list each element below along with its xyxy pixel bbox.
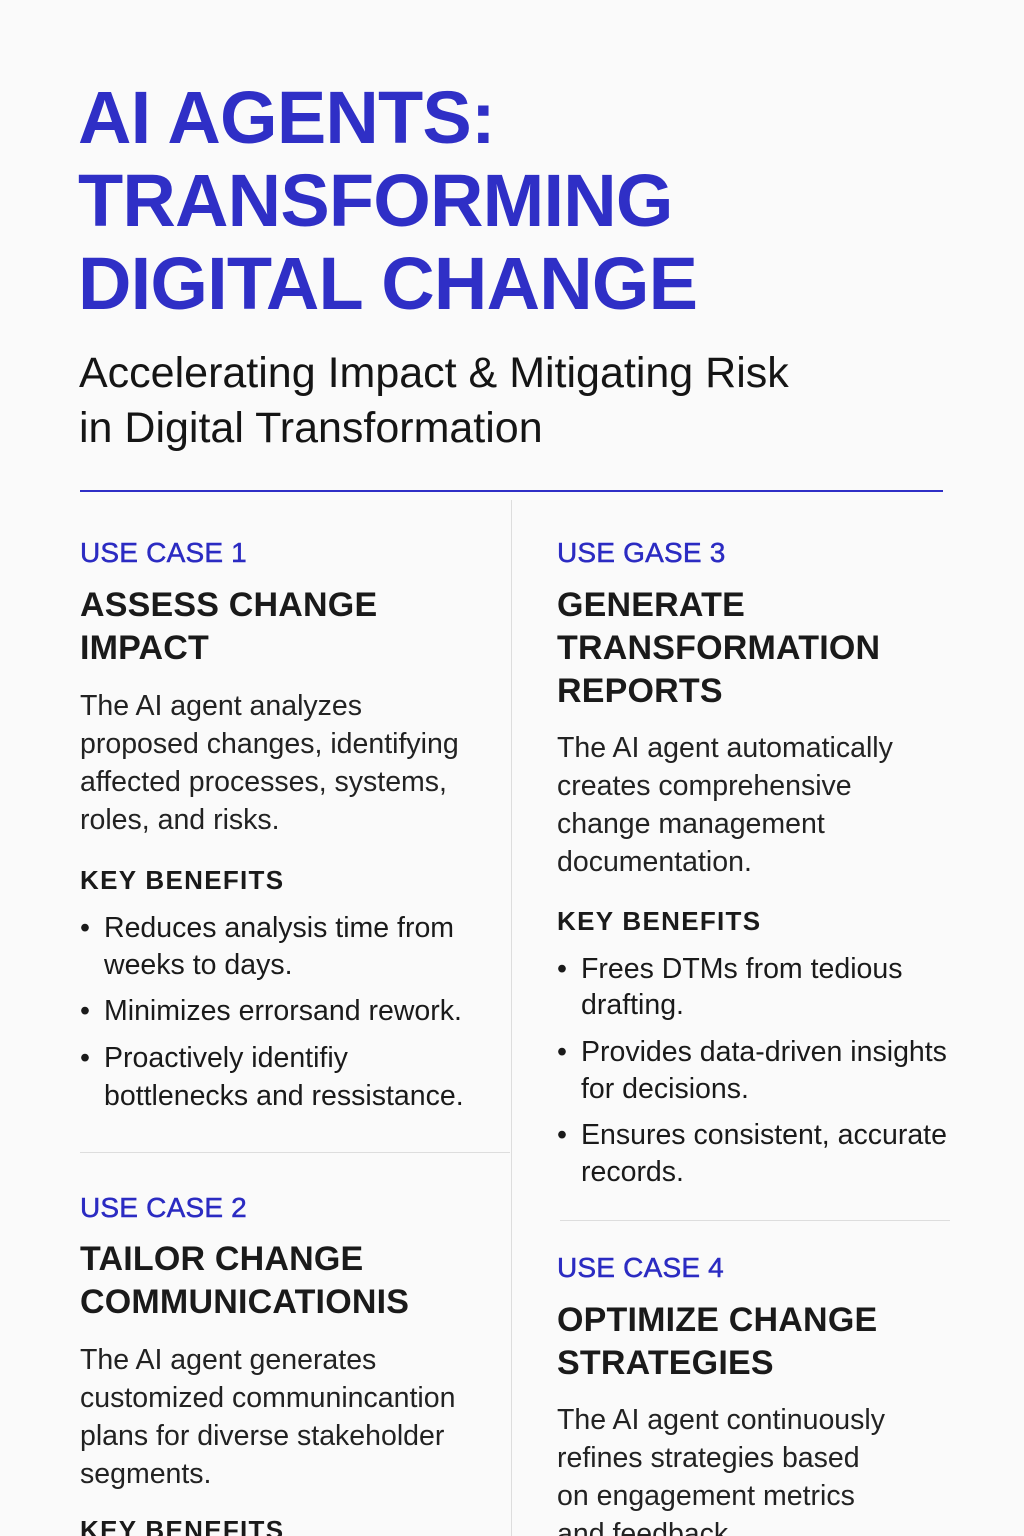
body: documentation. — [557, 846, 752, 878]
title: DIGITAL CHANGE — [78, 242, 697, 325]
header rule — [80, 490, 943, 492]
heading: TAILOR CHANGE — [80, 1240, 363, 1278]
body: plans for diverse stakeholder — [80, 1420, 444, 1452]
bullets: Provides data-driven insights — [581, 1036, 947, 1068]
bullets: Minimizes errorsand rework. — [104, 995, 462, 1027]
subtitle — [79, 349, 789, 452]
body: on engagement metrics — [557, 1480, 855, 1512]
subtitle: in Digital Transformation — [79, 404, 543, 452]
key benefits heading: KEY BENEFITS — [557, 906, 761, 936]
body — [557, 732, 893, 878]
panel: use case 2 — [80, 1192, 455, 1536]
heading: GENERATE — [557, 586, 745, 624]
bullets: Ensures consistent, accurate — [581, 1119, 947, 1151]
heading: STRATEGIES — [557, 1344, 774, 1382]
label: USE GASE 3 — [557, 537, 726, 568]
panel: use case 4 — [557, 1252, 885, 1536]
bullets: Proactively identifiy — [104, 1042, 348, 1074]
heading: REPORTS — [557, 672, 723, 710]
label: USE CASE 4 — [557, 1252, 724, 1283]
bullets: records. — [581, 1156, 684, 1188]
body: roles, and risks. — [80, 804, 280, 836]
heading — [557, 586, 880, 710]
body: proposed changes, identifying — [80, 728, 459, 760]
heading: ASSESS CHANGE — [80, 586, 377, 624]
bullets: bottlenecks and ressistance. — [104, 1080, 464, 1112]
bullets: for decisions. — [581, 1073, 749, 1105]
subtitle: Accelerating Impact & Mitigating Risk — [79, 349, 789, 397]
bullets — [81, 912, 464, 1112]
body: The AI agent analyzes — [80, 690, 362, 722]
heading: COMMUNICATIONIS — [80, 1283, 409, 1321]
title — [78, 76, 697, 325]
heading — [557, 1301, 877, 1382]
body — [80, 1344, 455, 1490]
body: affected processes, systems, — [80, 766, 447, 798]
body: creates comprehensive — [557, 770, 852, 802]
title: TRANSFORMING — [78, 159, 673, 242]
body — [557, 1404, 885, 1536]
panel: use case 3 — [557, 537, 947, 1188]
label: USE CASE 2 — [80, 1192, 247, 1223]
body: customized communincantion — [80, 1382, 455, 1414]
bullets: drafting. — [581, 989, 684, 1021]
body: refines strategies based — [557, 1442, 860, 1474]
heading — [80, 586, 377, 667]
bullets: Frees DTMs from tedious — [581, 953, 902, 985]
body — [80, 690, 459, 836]
key benefits heading: KEY BENEFITS — [80, 865, 284, 895]
title: AI AGENTS: — [78, 76, 495, 159]
bullets — [558, 953, 947, 1188]
bullets: weeks to days. — [104, 949, 293, 981]
heading: IMPACT — [80, 629, 209, 667]
bullets: Reduces analysis time from — [104, 912, 454, 944]
body: segments. — [80, 1458, 211, 1490]
label: USE CASE 1 — [80, 537, 247, 568]
panel: use case 1 — [80, 537, 464, 1112]
heading: OPTIMIZE CHANGE — [557, 1301, 877, 1339]
body: The AI agent continuously — [557, 1404, 885, 1436]
body: change management — [557, 808, 825, 840]
body: The AI agent generates — [80, 1344, 376, 1376]
heading: TRANSFORMATION — [557, 629, 880, 667]
body: The AI agent automatically — [557, 732, 893, 764]
heading — [80, 1240, 409, 1321]
